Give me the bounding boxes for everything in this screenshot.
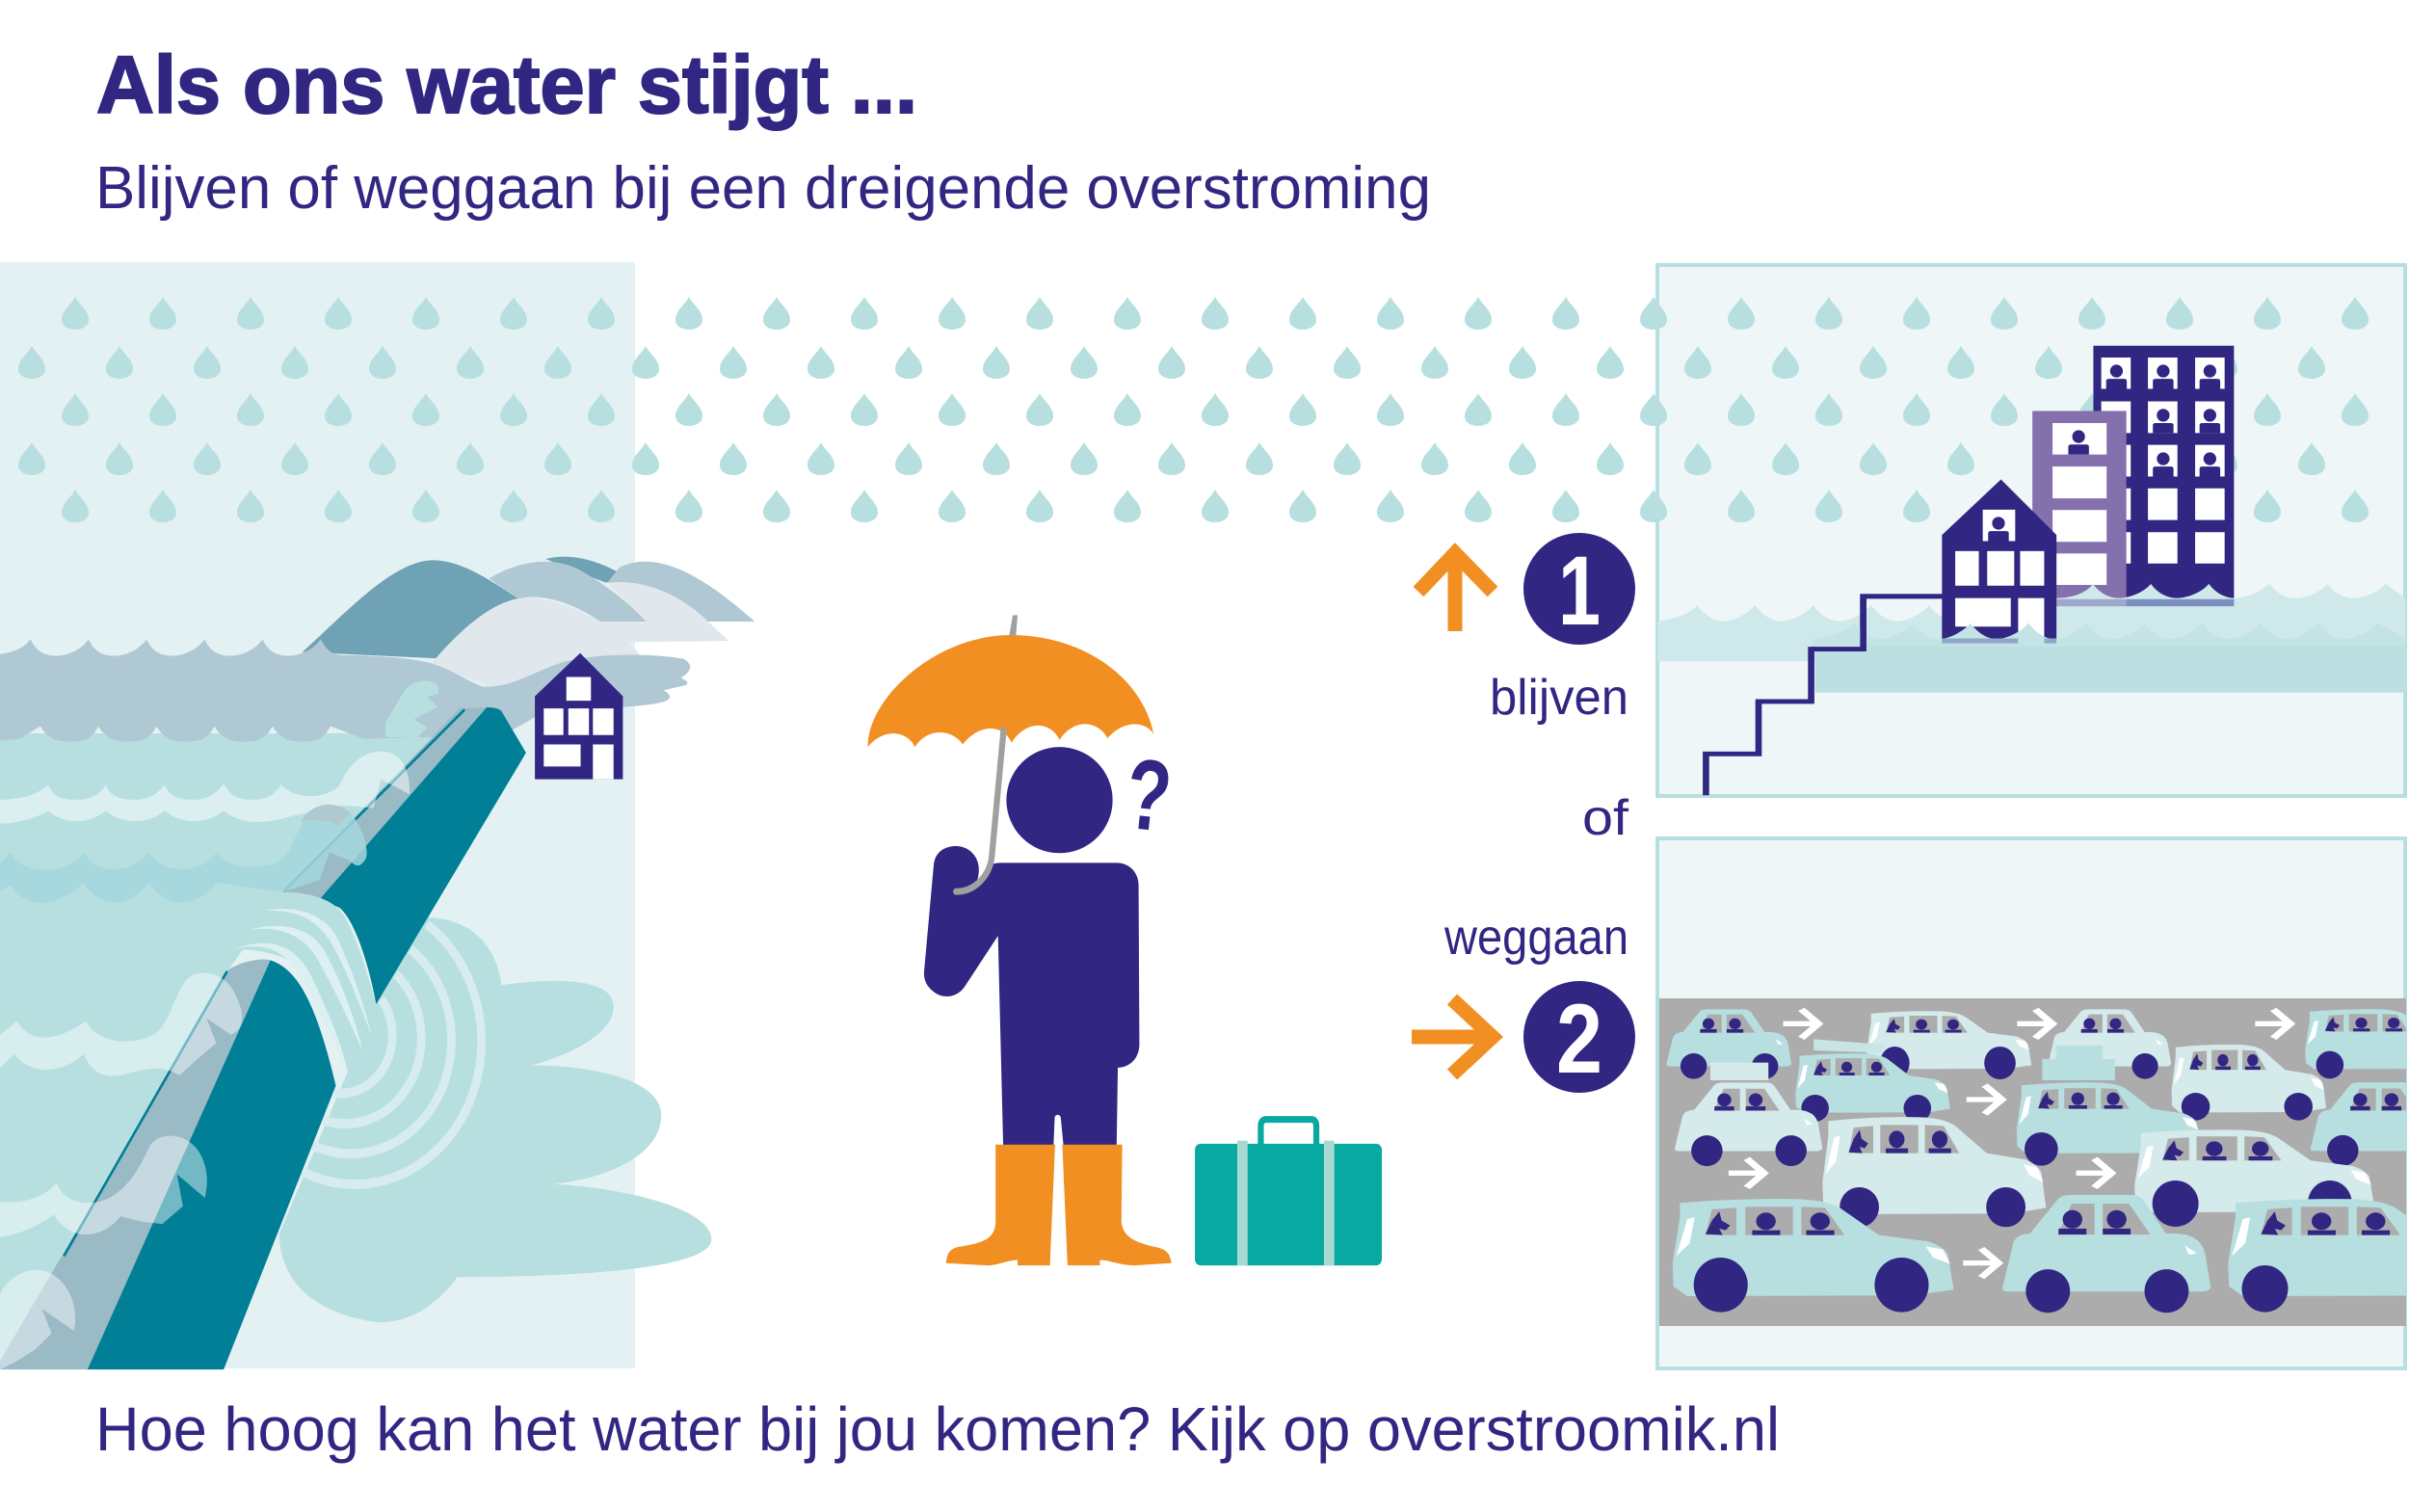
traffic direction arrows (1729, 1009, 2290, 1278)
sea water body (0, 733, 436, 1364)
stairs over water (1812, 597, 1946, 650)
road (1659, 998, 2409, 1326)
flood scene with dike breach (0, 557, 754, 1369)
dike seaward slope (0, 707, 487, 1369)
icon: umbrella handle (956, 730, 1003, 891)
subtitle: Blijven of weggaan bij een dreigende overstroming (95, 155, 1431, 222)
icon: suitcase (1195, 1120, 1382, 1265)
stay scene: buildings and flood water (1657, 346, 2405, 795)
label: of: of (1582, 790, 1629, 846)
purple building (2032, 411, 2127, 606)
label: blijven: blijven (1490, 670, 1628, 726)
arrow: right (1412, 999, 1493, 1074)
grey wave overtopping (0, 639, 690, 742)
icon: umbrella tip (1009, 615, 1018, 635)
waterfall streaks (234, 909, 371, 1074)
dike edge line (64, 709, 464, 1256)
tall apartment building (2093, 346, 2234, 606)
icon: boots (946, 1145, 1172, 1265)
inland flood puddle (279, 917, 711, 1322)
panel: left background (0, 262, 635, 1368)
canal house (1942, 479, 2056, 641)
badge 1: 1 (1558, 536, 1601, 646)
third row cars (1822, 1117, 2374, 1227)
dike body (88, 707, 526, 1369)
icon: small house (535, 653, 622, 780)
near flood water (1813, 623, 2405, 693)
panel: weggaan background (1657, 838, 2405, 1368)
front row cars (1673, 1195, 2409, 1313)
wave bands (0, 680, 438, 1369)
second row cars (1675, 1039, 2409, 1166)
water along buildings (2056, 584, 2405, 647)
waterfall through breach (231, 892, 379, 1073)
badge 2 (1523, 981, 1635, 1094)
far flood water (1657, 605, 2012, 661)
badge 2: 2 (1556, 984, 1602, 1094)
distant waves (303, 557, 754, 686)
back row cars (1666, 1009, 2409, 1079)
rain drops (15, 289, 2380, 530)
badge 1 (1523, 533, 1635, 646)
footer call to action: Hoe hoog kan het water bij jou komen? Kijk op overstroomik.nl (95, 1394, 1780, 1464)
label: weggaan: weggaan (1443, 910, 1628, 966)
person body (924, 747, 1139, 1146)
title: Als ons water stijgt ... (96, 40, 917, 130)
traffic jam scene (1659, 998, 2409, 1326)
arrow: up (1418, 553, 1493, 631)
question mark: ? (1121, 738, 1177, 854)
ripple rings (300, 924, 482, 1184)
panel: blijven background (1657, 265, 2405, 796)
icon: umbrella canopy (868, 635, 1153, 747)
person with umbrella (868, 615, 1382, 1265)
stairs (1706, 597, 1946, 795)
